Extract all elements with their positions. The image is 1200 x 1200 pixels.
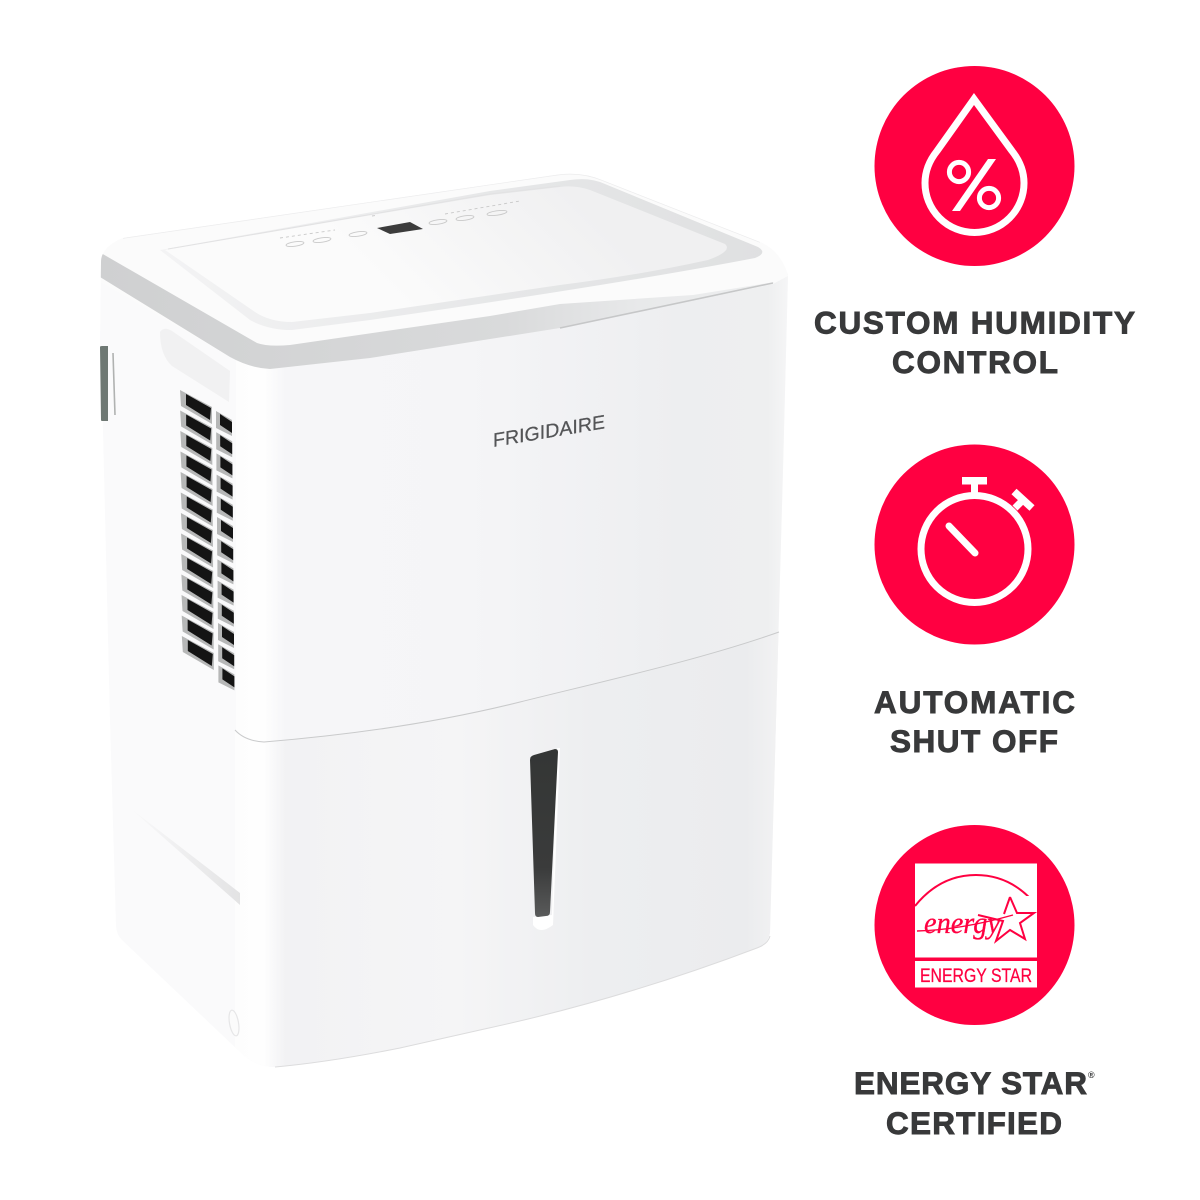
water tank front <box>510 800 774 1022</box>
tank seam <box>235 632 779 742</box>
brand logo: FRIGIDAIRE <box>493 411 605 452</box>
lid shadow line <box>560 283 773 328</box>
icon: stopwatch <box>921 477 1032 602</box>
drain plug <box>227 1009 241 1037</box>
icon: energy star logo: energy <box>924 905 1000 940</box>
control buttons <box>280 201 520 247</box>
feature: automatic shut off <box>874 444 1075 759</box>
lid outer edge <box>123 174 760 242</box>
side carry handle recess <box>160 329 230 402</box>
label: energy star certified: ® <box>1088 1070 1095 1080</box>
red circle <box>874 444 1074 644</box>
recessed top panel <box>165 186 727 322</box>
dehumidifier body silhouette <box>100 174 788 1067</box>
label: custom humidity control: CONTROL <box>892 344 1058 380</box>
red circle <box>874 825 1074 1025</box>
icon: energy star logo: ENERGY STAR <box>920 965 1032 987</box>
icon: water drop with percent <box>925 99 1024 233</box>
feature: energy star certified <box>854 825 1095 1141</box>
recess around top panel <box>160 179 762 330</box>
upper front panel <box>548 282 778 694</box>
red circle <box>874 66 1074 266</box>
icon: energy star logo <box>915 864 1037 988</box>
latch slot <box>113 353 115 415</box>
side grey latch <box>100 346 108 421</box>
product: Frigidaire dehumidifier <box>90 174 800 1080</box>
tank level window <box>530 749 558 917</box>
label: energy star certified: CERTIFIED <box>886 1105 1062 1141</box>
label: automatic shut off: SHUT OFF <box>890 723 1058 759</box>
label: energy star certified: ENERGY STAR <box>854 1065 1087 1101</box>
base side groove <box>130 808 240 905</box>
panel top line <box>168 207 413 250</box>
lid top surface <box>611 273 782 300</box>
tank window highlight <box>533 748 560 930</box>
bottom edge line <box>275 936 770 1067</box>
side air vents <box>180 390 234 690</box>
label: custom humidity control: CUSTOM HUMIDITY <box>814 304 1135 340</box>
label: energy star certified <box>854 1065 1095 1141</box>
label: automatic shut off: AUTOMATIC <box>874 684 1075 720</box>
control display <box>377 222 423 234</box>
grey lid band <box>100 253 775 369</box>
feature: custom humidity control <box>814 66 1135 380</box>
label: automatic shut off <box>874 684 1075 759</box>
label: custom humidity control <box>814 304 1135 380</box>
